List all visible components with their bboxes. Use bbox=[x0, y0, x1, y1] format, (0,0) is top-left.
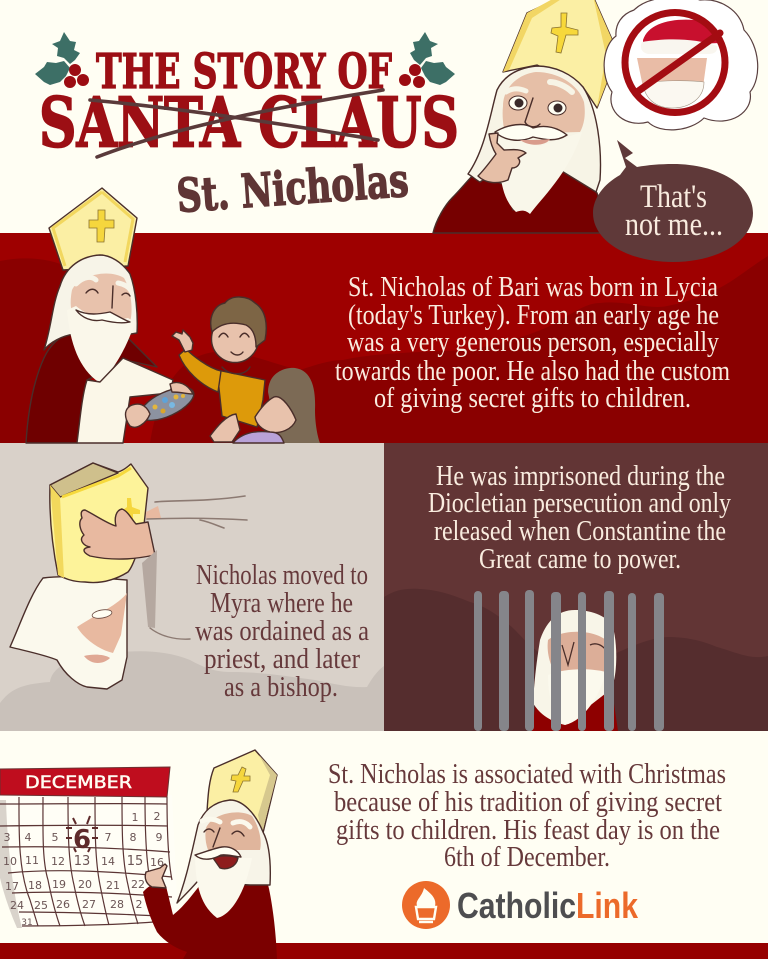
cloak bbox=[26, 332, 157, 443]
calendar dates: 14 bbox=[101, 855, 115, 868]
icon: flame cup bbox=[402, 881, 450, 929]
text: ordination bbox=[195, 560, 369, 703]
calendar dates: 31 bbox=[21, 918, 33, 928]
mitre bbox=[207, 750, 277, 833]
illustration: St. Nicholas giving gifts bbox=[26, 188, 320, 443]
prison bars bbox=[474, 590, 664, 731]
calendar dates: 21 bbox=[106, 879, 120, 892]
beard bbox=[498, 132, 582, 214]
mouth bbox=[84, 655, 110, 663]
calendar dates: 13 bbox=[74, 854, 90, 869]
features bbox=[202, 819, 250, 847]
panel: prison background bbox=[384, 443, 768, 731]
calendar dates: 28 bbox=[110, 898, 124, 911]
heading: st nicholas: St. Nicholas bbox=[175, 153, 410, 223]
mitre bbox=[50, 463, 148, 583]
face bbox=[77, 593, 127, 653]
calendar dates: 17 bbox=[5, 880, 19, 893]
moustache bbox=[195, 847, 241, 859]
hair bbox=[177, 800, 270, 903]
beard bbox=[67, 306, 135, 383]
moustache bbox=[76, 310, 130, 323]
calendar dates: 22 bbox=[131, 878, 145, 891]
panel: red biography band bbox=[0, 233, 768, 443]
text: ordination: was ordained as a bbox=[195, 616, 369, 647]
girl bbox=[210, 368, 320, 443]
face bbox=[503, 72, 585, 134]
beard bbox=[548, 669, 606, 725]
beard bbox=[195, 858, 252, 918]
text: imprisonment: He was imprisoned during the bbox=[436, 461, 725, 492]
calendar dates: 9 bbox=[156, 831, 162, 844]
calendar dates: 4 bbox=[24, 831, 32, 844]
month label: DECEMBER bbox=[25, 773, 132, 792]
highlighted date 6: 6 bbox=[73, 825, 91, 855]
thumbs-up hand bbox=[145, 864, 167, 888]
hands bbox=[126, 404, 150, 427]
calendar dates: 2 bbox=[136, 898, 142, 911]
illustration: laughing St. Nicholas bbox=[143, 750, 277, 959]
calendar dates: 11 bbox=[25, 854, 39, 867]
footer band bbox=[0, 943, 768, 959]
text: ordination: priest, and later bbox=[204, 644, 361, 675]
calendar dates: 5 bbox=[52, 831, 58, 844]
hair bbox=[10, 577, 127, 689]
face bbox=[71, 274, 132, 322]
robe bbox=[532, 690, 618, 731]
calendar dates: 15 bbox=[127, 854, 143, 869]
calendar dates bbox=[3, 810, 164, 928]
highlighted date 6 bbox=[66, 816, 98, 855]
calendar dates: 2 bbox=[154, 810, 160, 823]
illustration: ordination of St. Nicholas bbox=[10, 463, 247, 689]
text: feast day bbox=[328, 759, 726, 873]
calendar dates: 18 bbox=[28, 879, 42, 892]
icon: right holly bbox=[399, 32, 455, 88]
robe bbox=[77, 358, 173, 443]
icon: prohibition sign bbox=[625, 12, 725, 112]
icon: left holly bbox=[35, 32, 89, 88]
calendar dates: 12 bbox=[51, 855, 65, 868]
calendar dates: 7 bbox=[104, 831, 112, 844]
calendar header bbox=[0, 767, 170, 797]
robe bbox=[143, 880, 277, 959]
illustration: thinking St. Nicholas bbox=[433, 0, 618, 233]
eyes and brows bbox=[506, 82, 572, 127]
text: biography: of giving secret gifts to children. bbox=[374, 383, 691, 414]
hair bbox=[533, 610, 616, 725]
text: feast day: gifts to children. His feast day is on the bbox=[336, 815, 720, 846]
illustration: St. Nicholas in prison bbox=[532, 610, 618, 731]
calendar dates: 27 bbox=[82, 898, 96, 911]
hand bbox=[80, 509, 155, 559]
heading: santa claus: SANTA CLAUS bbox=[39, 84, 459, 164]
calendar grid bbox=[0, 797, 176, 926]
logo: CatholicLink bbox=[402, 881, 639, 929]
calendar dates: 3 bbox=[4, 831, 10, 844]
calendar dates: 8 bbox=[130, 831, 136, 844]
thinking hand bbox=[478, 133, 526, 183]
moustache bbox=[495, 125, 567, 140]
sleeve bbox=[142, 496, 247, 639]
text: ordination: Nicholas moved to bbox=[196, 560, 368, 591]
text: biography bbox=[335, 272, 730, 414]
heading: the story of: THE STORY OF bbox=[96, 44, 392, 100]
calendar dates: 10 bbox=[3, 855, 17, 868]
speech bubble bbox=[593, 140, 753, 262]
text: imprisonment: Great came to power. bbox=[479, 544, 681, 575]
speech bubble: not me... bbox=[625, 207, 723, 243]
strike-through lines bbox=[90, 90, 383, 157]
hair bbox=[44, 255, 137, 350]
calendar dates: 19 bbox=[52, 878, 66, 891]
thought bubble bbox=[604, 0, 758, 130]
text: imprisonment: released when Constantine the bbox=[434, 516, 726, 547]
calendar dates: 1 bbox=[132, 811, 138, 824]
robe bbox=[433, 167, 610, 233]
eye bbox=[91, 608, 113, 620]
wordmark: CatholicLink bbox=[457, 885, 639, 926]
calendar dates: 20 bbox=[78, 878, 92, 891]
mitre bbox=[49, 188, 137, 270]
calendar dates: 16 bbox=[150, 856, 164, 869]
text: feast day: because of his tradition of giving secret bbox=[334, 787, 722, 818]
icon: Santa face bbox=[637, 20, 720, 108]
boy bbox=[172, 297, 266, 427]
calendar dates: 26 bbox=[56, 898, 70, 911]
face bbox=[205, 812, 261, 850]
title block bbox=[35, 32, 459, 223]
calendar bbox=[0, 767, 178, 928]
plate of gifts bbox=[136, 381, 198, 427]
text: biography: St. Nicholas of Bari was born in Lycia bbox=[348, 272, 718, 303]
mouth bbox=[213, 856, 238, 869]
mouth bbox=[520, 139, 550, 145]
face bbox=[548, 632, 608, 678]
text: imprisonment bbox=[428, 461, 731, 575]
speech text: That's bbox=[640, 179, 707, 215]
calendar dates: 24 bbox=[10, 899, 24, 912]
text: feast day: 6th of December. bbox=[444, 842, 610, 873]
calendar dates: 25 bbox=[34, 899, 48, 912]
panel: mitre bishop background bbox=[0, 443, 384, 731]
hair bbox=[468, 66, 600, 192]
text: ordination: as a bishop. bbox=[224, 672, 338, 703]
text: ordination: Myra where he bbox=[210, 588, 353, 619]
brows, eyes and nose bbox=[76, 277, 131, 308]
mitre bbox=[503, 0, 618, 108]
